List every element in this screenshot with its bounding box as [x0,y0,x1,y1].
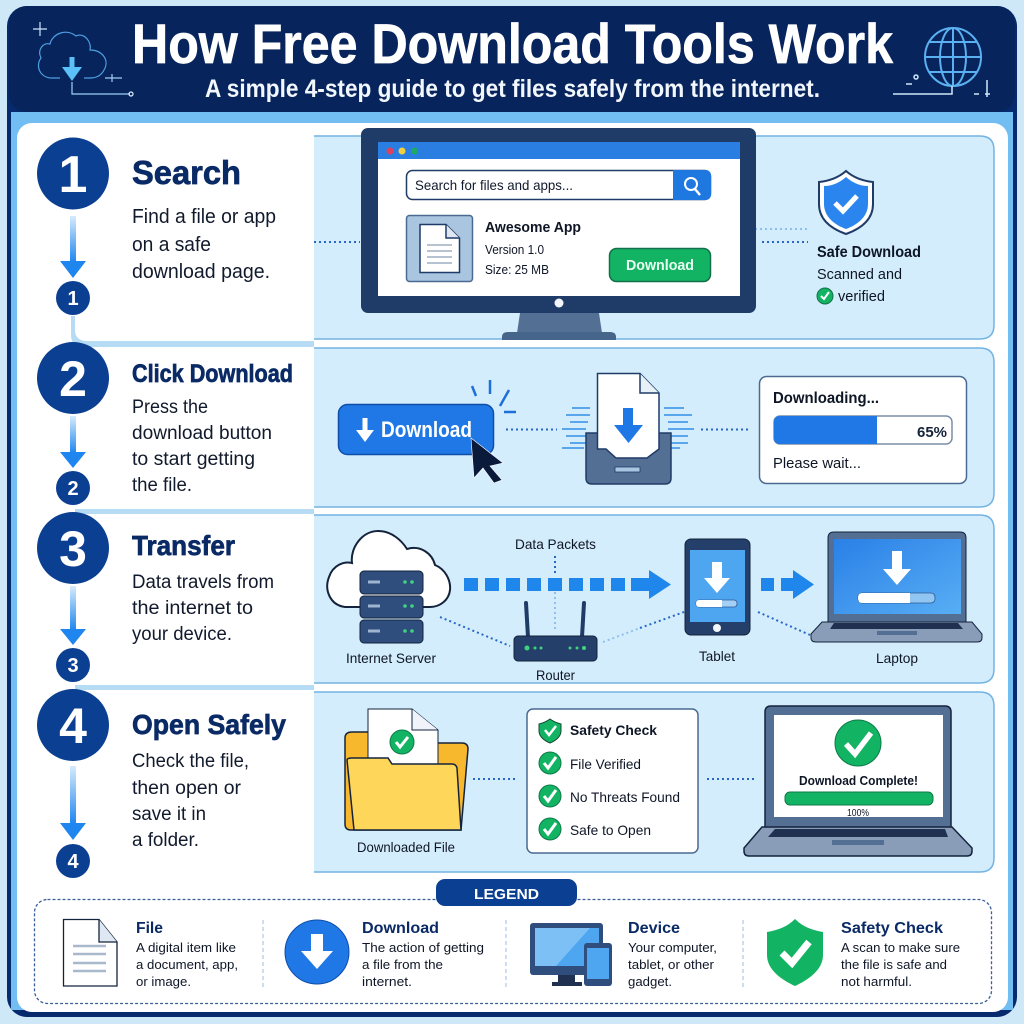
description 1: download page. [132,261,270,283]
step number 1: 1 [59,146,87,204]
tray [586,433,671,484]
legend item: download [285,920,484,989]
laptop base [744,827,972,856]
document [598,374,659,458]
search box [406,170,711,200]
download button: Download [381,417,472,442]
legend item: device [530,920,717,989]
legend frame [34,900,992,1004]
app file thumbnail [406,216,472,282]
description 4: then open or [132,778,242,799]
legend item: safety check: not harmful. [841,974,912,989]
icon: verified check [817,288,833,304]
check list: File Verified [570,756,641,772]
search box: Search for files and apps... [415,177,573,193]
step number 2 [37,342,109,414]
step number 4 [37,689,109,761]
heading: Open Safely: Open Safely [132,709,286,740]
description 1: on a safe [132,234,211,256]
legend item: device: gadget. [628,974,672,989]
legend item: device: tablet, or other [628,957,715,972]
connector dots step 2 [506,428,749,430]
card: downloading progress [760,376,966,484]
safe download text: verified [838,288,885,305]
app info [485,219,581,277]
description 4: save it in [132,804,206,825]
legend item: download: Download [362,920,439,937]
folder back [345,732,468,830]
icon: laptop download complete [744,706,972,856]
card: downloading progress: Please wait... [773,455,861,472]
legend item: file: File [136,920,163,937]
legend [34,879,992,1004]
step 1 text and markers [37,138,276,315]
legend item: file: a document, app, [136,957,238,972]
panel: step 3 illustration [314,515,994,683]
check list: Safety Check [570,722,657,738]
small marker 1 [56,281,90,315]
step number 1 [37,138,109,210]
step number 3 [37,512,109,584]
row dividers in left column [71,316,314,690]
legend item: device: Device [628,920,680,937]
small marker 4: 4 [67,851,79,873]
description 2: Press the [132,397,208,418]
small marker 4 [56,844,90,878]
download button [338,404,494,454]
card: safety check [527,709,698,853]
card: downloading progress: Downloading... [773,390,879,407]
green download button: Download [626,257,694,274]
small marker 2 [56,471,90,505]
arrow 4 [60,766,86,840]
monitor stand [502,313,616,340]
legend item: download: a file from the [362,957,443,972]
icon: folder with verified file [345,709,468,830]
arrow 3 [60,586,86,645]
small marker 3 [56,648,90,682]
step number 4: 4 [59,698,87,754]
screen [378,142,740,296]
connector dots step 3 [440,556,810,646]
subtitle: A simple 4-step guide to get files safely from the internet. [205,75,820,103]
safe download badge [817,171,921,305]
description 4 [132,751,249,851]
description 1 [132,206,276,283]
description 2: to start getting [132,449,255,470]
label: Laptop: Laptop [876,650,918,666]
panel: step 1 illustration [314,136,994,339]
title: How Free Download Tools Work [132,12,894,75]
folder front [347,758,461,830]
legend item: file: A digital item like [136,940,236,955]
step number 2: 2 [59,351,87,407]
safe download text: Scanned and [817,266,902,283]
green checks [539,752,561,840]
small marker 3: 3 [67,655,79,677]
heading: Transfer: Transfer [132,530,235,561]
icon: cursor [471,438,503,483]
label: Router: Router [536,667,575,683]
complete bar [785,792,933,805]
legend item: device: Your computer, [628,940,717,955]
check list [570,722,680,838]
step 3 text and markers [37,512,274,682]
progress bar 65%: 65% [917,424,947,441]
big check [835,720,881,766]
motion lines [562,408,694,448]
icon: file [64,920,117,986]
description 3 [132,572,274,645]
panel: step 2 illustration [314,348,994,507]
check list: No Threats Found [570,789,680,805]
icon: laptop [811,532,982,642]
arrow 2 [60,416,86,468]
label: Downloaded File: Downloaded File [357,839,455,855]
blue download button with cursor [338,380,516,483]
app info: Size: 25 MB [485,262,549,277]
illustration: desktop monitor with search page [361,128,756,340]
description 3: Data travels from [132,572,274,593]
server stack [360,571,423,643]
legend item: safety check: A scan to make sure [841,940,960,955]
monitor home button [554,298,564,308]
step 4 text and markers [37,689,286,878]
green download button [610,248,710,282]
label: Tablet: Tablet [699,648,735,664]
icon: laptop download complete: 100% [847,808,869,819]
legend item: file: or image. [136,974,191,989]
icon: small shield [539,719,561,743]
click rays [472,380,516,412]
legend item: download: The action of getting [362,940,484,955]
icon: monitor and phone [530,923,612,986]
icon: file dropping into tray [586,374,671,484]
small marker 1: 1 [67,288,79,310]
laptop progress [858,593,935,603]
safe download text [817,244,921,305]
description 1: Find a file or app [132,206,276,228]
label: Data Packets: Data Packets [515,536,596,552]
icon: cloud download [33,22,133,96]
legend item: download: internet. [362,974,412,989]
icon: router [514,603,597,661]
legend item: safety check: Safety Check [841,920,943,937]
icon: shield [819,171,873,234]
heading: Search: Search [132,154,241,191]
description 4: Check the file, [132,751,249,772]
legend item: safety check: the file is safe and [841,957,947,972]
icon: cloud with server [327,531,450,643]
header [9,6,1015,112]
description 2: the file. [132,475,192,496]
legend item: safety check [767,919,960,989]
safe download text: Safe Download [817,244,921,261]
legend item: file [64,920,238,989]
description 2: download button [132,423,272,444]
legend pill: LEGEND [474,886,539,903]
description 2 [132,397,272,496]
cloud [327,531,450,607]
description 4: a folder. [132,830,199,851]
server lights [368,580,414,633]
description 3: the internet to [132,598,253,619]
arrow 1 [60,216,86,278]
icon: download circle [285,920,349,984]
label: Internet Server: Internet Server [346,650,436,666]
app info: Awesome App [485,219,581,236]
verified file [368,709,438,770]
data packets flow arrow [464,570,814,599]
panel: step 4 illustration [314,692,994,872]
connector dots step 1 [314,229,808,265]
step 2 text and markers [37,342,293,505]
legend pill [436,879,577,906]
progress bar 65% [774,416,952,444]
connector dots step 4 [473,778,755,780]
check list: Safe to Open [570,822,651,838]
browser title bar [378,142,740,159]
monitor body [361,128,756,313]
icon: tablet [685,539,750,635]
icon: laptop download complete: Download Complete! [799,773,918,788]
icon: green shield [767,919,823,986]
tablet progress [696,600,737,607]
small marker 2: 2 [67,478,79,500]
icon: globe network [893,28,990,97]
step number 3: 3 [59,521,87,577]
description 3: your device. [132,624,232,645]
app info: Version 1.0 [485,242,544,257]
heading: Click Download: Click Download [132,360,293,388]
